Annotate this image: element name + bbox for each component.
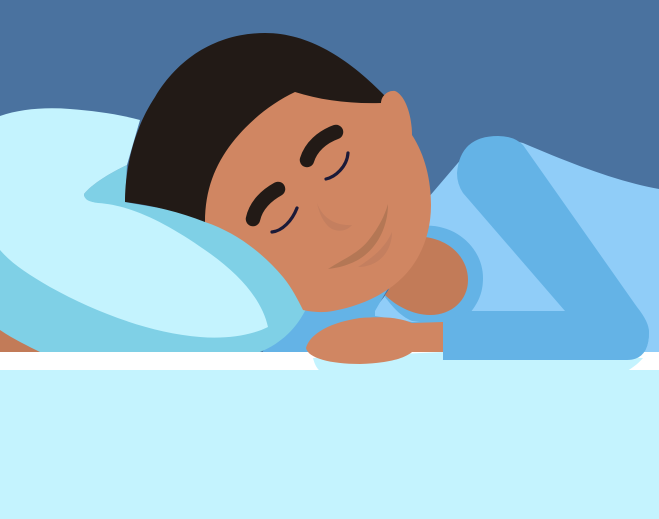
- shoulder under pillow: [262, 285, 443, 353]
- right eyebrow: [307, 132, 336, 160]
- pillow highlight: [0, 108, 268, 338]
- arm sleeve: [443, 136, 649, 360]
- left eyebrow: [253, 189, 278, 219]
- mattress sheet: light base: [0, 370, 659, 519]
- sleeve collar: [385, 226, 483, 325]
- head: [205, 91, 431, 312]
- right closed eye: [326, 153, 348, 179]
- neck: [385, 237, 468, 315]
- mouth: [328, 204, 388, 269]
- lower lip: [358, 232, 392, 267]
- nose: [317, 203, 352, 231]
- face: [205, 91, 431, 312]
- left closed eye: [272, 208, 297, 232]
- arm sleeve lower edge: [443, 322, 649, 360]
- hand: [306, 317, 443, 364]
- hair: [125, 33, 385, 222]
- sheet under body: [313, 352, 643, 371]
- pillow shadow: [0, 165, 320, 352]
- mattress sheet: white band: [0, 352, 659, 371]
- background wall: [0, 0, 659, 353]
- left body skin: [0, 328, 42, 352]
- blanket body: [373, 137, 659, 353]
